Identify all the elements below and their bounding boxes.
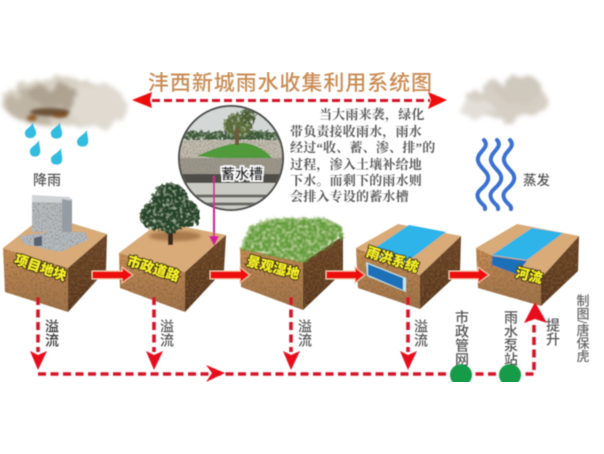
icon: tree [140,183,201,245]
label: rainwater pump station: 雨水泵站 [503,310,519,366]
label: storage tank: 蓄水槽 [221,166,263,182]
label: stormwater system: 雨洪系统 [364,243,421,275]
arrow: overflow heads [30,302,547,382]
text block: description: 下水。而剩下的雨水则 [290,173,422,188]
credit: graphic author: 制图/唐保虎 [574,294,590,364]
overflow network: dashed red lines [38,297,534,374]
icon: evaporation waves [477,140,514,209]
cloud: evaporation cloud right [458,75,547,119]
arrow: flow wetland to stormwater [326,267,365,283]
text block: description: 经过“收、蓄、渗、排”的 [290,140,435,155]
arrow: flow stormwater to river [449,267,489,283]
label: overflow 1: 溢流 [44,319,60,348]
arrow: magenta tank to road [209,176,219,246]
icon: pump station node [499,364,521,386]
label: overflow 4: 溢流 [413,319,429,348]
text block: description: 带负责接收雨水，雨水 [289,124,422,140]
text block: description: 会排入专设的蓄水槽 [290,189,409,204]
arrow: flow road to wetland [210,267,250,283]
label: municipal road: 市政道路 [125,252,182,284]
label: river: 河流 [514,264,545,286]
title: 沣西新城雨水收集利用系统图 [148,72,432,95]
photo: storage tank circle [175,105,287,213]
text block: description: 当大雨来袭，绿化 [319,107,425,123]
icon: rain drops [25,122,88,165]
label: evaporation: 蒸发 [523,173,550,188]
block: landscape wetland [240,218,343,310]
label: lift: 提升 [545,318,561,346]
label: municipal pipe network: 市政管网 [454,309,470,366]
arrow: title left arrow to cloud [132,92,447,109]
cloud: rain cloud left [2,78,126,128]
icon: grass [240,218,343,262]
icon: buildings [20,195,88,252]
arrow: flow plot to road [92,267,133,283]
label: rainfall: 降雨 [33,172,61,188]
block: project plot [3,195,107,312]
text block: description [289,107,435,204]
label: landscape wetland: 景观湿地 [245,252,302,282]
block: river [476,224,579,306]
block: stormwater system [356,224,461,309]
block: municipal road [119,183,226,312]
label: overflow 2: 溢流 [159,319,175,348]
icon: municipal network node [450,364,472,386]
label: overflow 3: 溢流 [297,319,313,348]
text block: description: 过程，渗入土壤补给地 [290,157,422,173]
label: project plot: 项目地块 [12,251,69,284]
